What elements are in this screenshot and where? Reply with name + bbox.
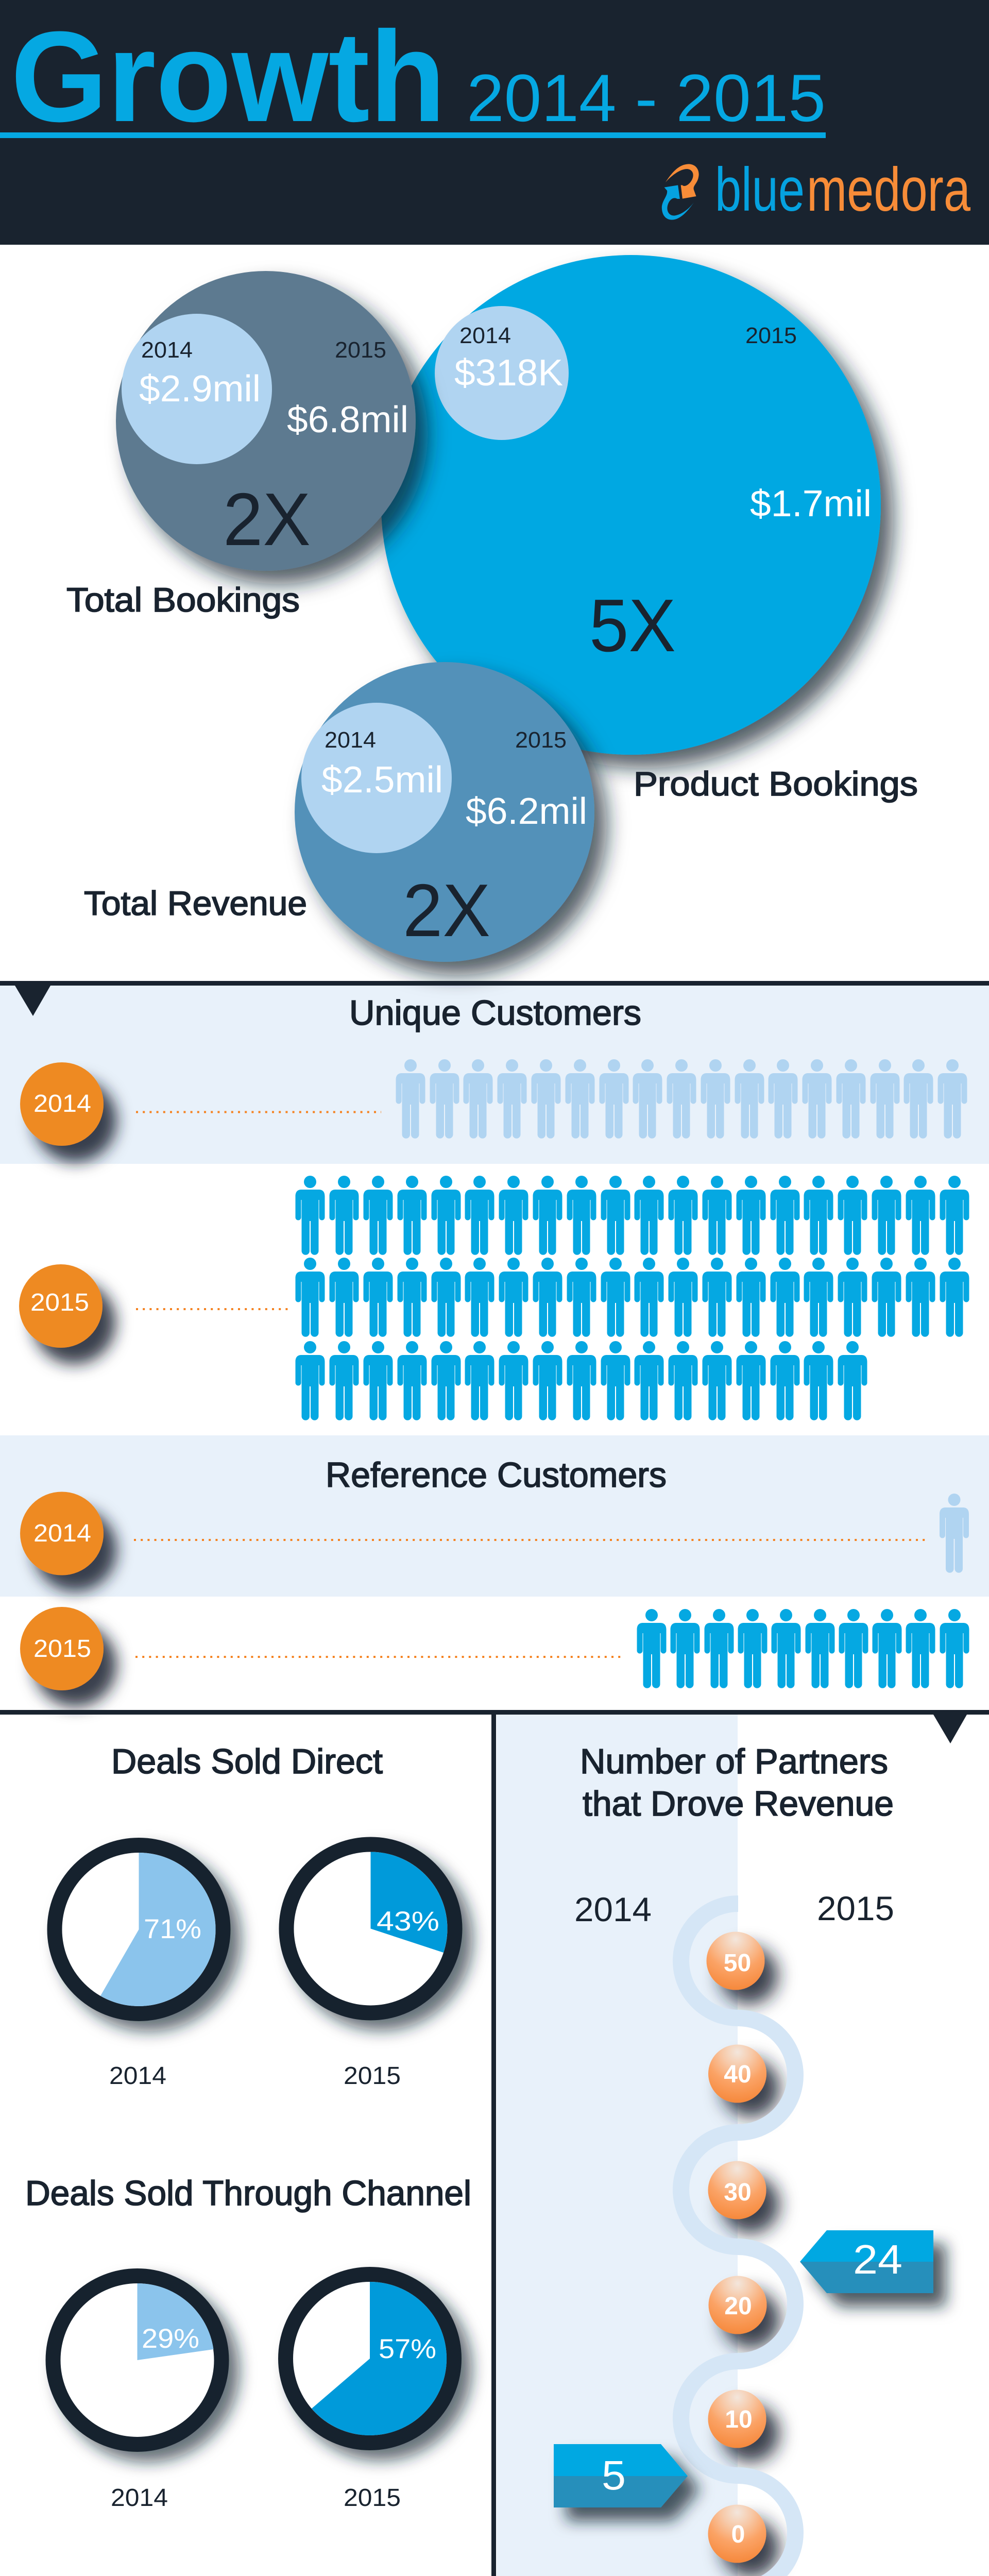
logo wordmark: blue: blue	[715, 155, 805, 224]
badge: reference customers 2015	[20, 1607, 104, 1690]
label: 2014: 2014	[325, 727, 376, 753]
ball: 50: 50	[724, 1950, 751, 1977]
ball: 10	[708, 2389, 766, 2448]
person: 2014 reference customer	[940, 1494, 969, 1573]
ball: 40: 40	[724, 2061, 752, 2088]
panel: product bookings bubble	[381, 255, 881, 755]
pie chart: channel 2014	[53, 2276, 221, 2444]
label: 2014: 2014	[141, 337, 193, 363]
label: 2014: 2014	[109, 2062, 166, 2090]
ball: 20: 20	[724, 2293, 752, 2320]
ball: 30	[708, 2161, 766, 2219]
value: $318K: $318K	[454, 352, 563, 394]
ball: 20	[709, 2276, 766, 2334]
panel: deals sold	[25, 1742, 471, 2512]
ball: 0	[708, 2505, 766, 2563]
heading: Reference Customers: Reference Customers	[326, 1455, 667, 1495]
heading: Product Bookings: Product Bookings	[634, 765, 918, 803]
people row: 2015 reference customers	[637, 1609, 969, 1688]
section divider with pointer	[0, 1710, 989, 1743]
arrow tag: 2015 value 24: 24	[853, 2236, 902, 2282]
scale balls	[707, 1932, 766, 2563]
label: 2014: 2014	[111, 2484, 168, 2512]
pie chart: direct 2014	[55, 1845, 223, 2013]
heading: that Drove Revenue line 2: that Drove Revenue	[583, 1784, 894, 1823]
heading: Number of Partners line 1: Number of Partners	[580, 1742, 888, 1781]
label: 2015: 2015	[745, 323, 797, 348]
panel: total bookings bubble	[116, 271, 416, 571]
winding scale path	[681, 1904, 795, 2576]
label: 2015: 2015	[344, 2484, 401, 2512]
badge: reference customers 2014	[20, 1492, 104, 1575]
icon: blue medora logo mark	[662, 164, 699, 220]
value: $2.5mil: $2.5mil	[321, 759, 443, 801]
badge: reference customers 2015: 2015	[33, 1635, 91, 1663]
label: 2014: 2014	[574, 1890, 652, 1928]
header banner	[0, 0, 989, 245]
panel: number of partners	[554, 1742, 933, 2576]
heading: Total Bookings: Total Bookings	[66, 581, 300, 619]
label: 2015: 2015	[817, 1889, 894, 1927]
people row: 2014 unique customers	[396, 1059, 967, 1139]
pie chart: channel 2014: 29%	[142, 2324, 199, 2354]
badge: unique customers 2014	[20, 1062, 104, 1146]
title: Growth: Growth	[11, 5, 446, 148]
heading: Deals Sold Direct: Deals Sold Direct	[111, 1742, 383, 1781]
ball: 40	[708, 2044, 766, 2103]
badge: reference customers 2014: 2014	[33, 1520, 91, 1547]
label: 2015: 2015	[344, 2062, 401, 2090]
dotted leader	[136, 1111, 381, 1113]
dotted leader	[134, 1539, 929, 1541]
arrow tag: 2015 value 24	[800, 2230, 933, 2293]
value: $1.7mil: $1.7mil	[750, 483, 872, 524]
badge: unique customers 2015: 2015	[30, 1289, 89, 1316]
dotted leader	[135, 1656, 624, 1658]
value: 2X: 2X	[223, 478, 311, 561]
pie chart: direct 2015	[286, 1844, 455, 2013]
title: year range: 2014 - 2015	[467, 60, 826, 135]
vertical panel divider	[491, 1715, 496, 2576]
label: 2015: 2015	[335, 337, 386, 363]
pie chart: direct 2014: 71%	[144, 1914, 201, 1944]
ball: 0: 0	[731, 2521, 745, 2548]
heading: Deals Sold Through Channel: Deals Sold Through Channel	[25, 2174, 471, 2213]
badge: unique customers 2014: 2014	[33, 1090, 91, 1117]
panel: total revenue bubble	[295, 662, 594, 962]
title underline	[0, 132, 826, 138]
ball: 10: 10	[725, 2406, 753, 2433]
people rows: 2015 unique customers	[296, 1176, 969, 1420]
badge: unique customers 2015	[19, 1264, 103, 1348]
value: $2.9mil: $2.9mil	[139, 368, 261, 410]
value: 5X: 5X	[589, 584, 676, 667]
section divider bar with pointer	[0, 981, 989, 1016]
value: $6.2mil: $6.2mil	[466, 791, 587, 832]
pie chart: channel 2015	[285, 2274, 454, 2443]
dotted leader	[136, 1308, 289, 1310]
pie chart: channel 2015: 57%	[379, 2334, 436, 2364]
ball: 30: 30	[724, 2179, 752, 2206]
pie chart: direct 2015: 43%	[377, 1906, 439, 1937]
value: 2X: 2X	[403, 869, 490, 952]
label: 2015: 2015	[515, 727, 567, 753]
arrow tag: 2014 value 5: 5	[602, 2452, 626, 2498]
ball: 50	[707, 1932, 764, 1990]
heading: Unique Customers: Unique Customers	[349, 993, 641, 1032]
background bands	[0, 986, 989, 2576]
heading: Total Revenue: Total Revenue	[84, 884, 307, 922]
label: 2014: 2014	[459, 323, 511, 348]
arrow tag: 2014 value 5	[554, 2444, 688, 2507]
value: $6.8mil: $6.8mil	[287, 399, 408, 440]
